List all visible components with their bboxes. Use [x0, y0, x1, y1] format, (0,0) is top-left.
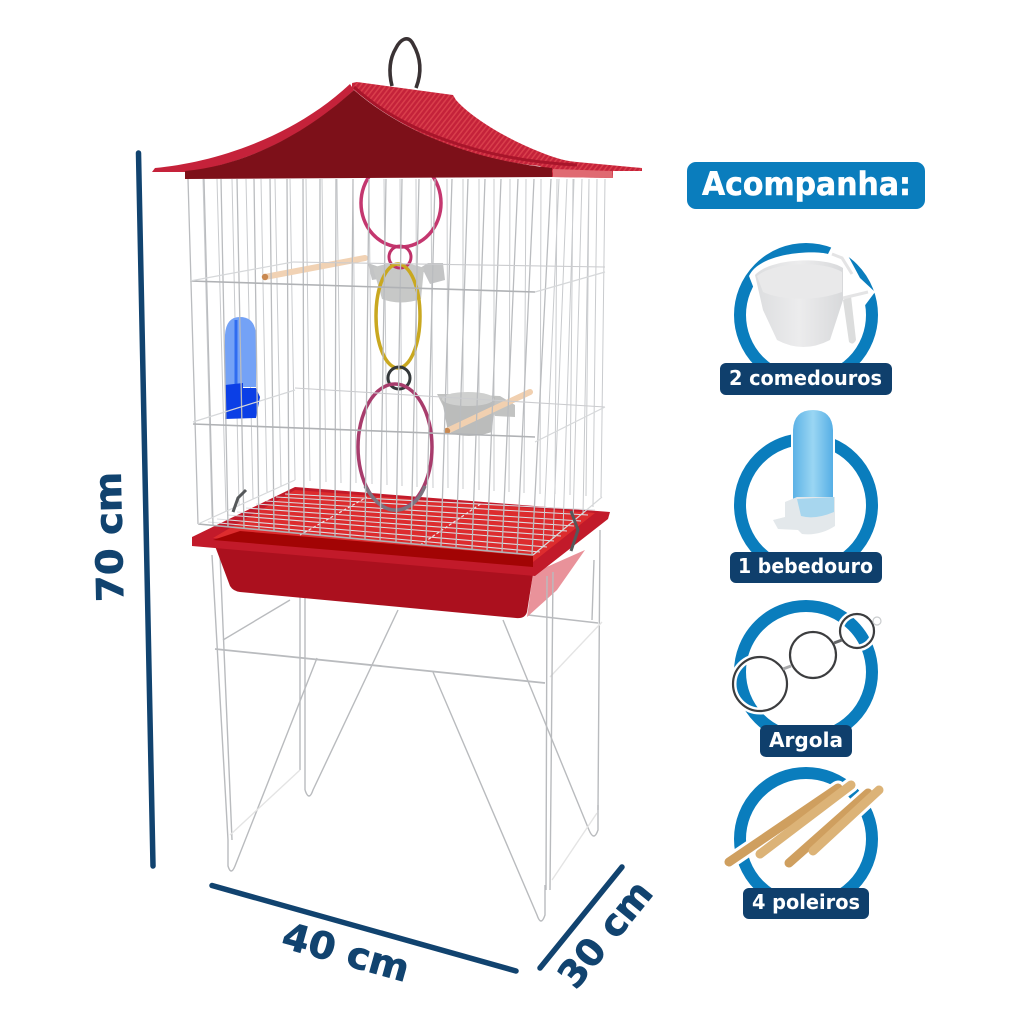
bracket: [843, 296, 856, 344]
tray rim: [192, 487, 610, 576]
item: 2 comedouros: [720, 246, 892, 395]
icon: feeder cup: [749, 246, 875, 350]
item: 1 bebedouro: [730, 408, 882, 583]
cage front wires: [188, 179, 551, 555]
roof ridged side: [352, 82, 642, 178]
feeder lower: [437, 392, 530, 436]
height dimension line: [138, 153, 153, 866]
tray body: [215, 546, 533, 618]
roof left flap: [152, 84, 354, 172]
tray inner wall: [213, 531, 533, 567]
ring: [740, 439, 872, 571]
hanging handle: [390, 39, 420, 88]
floor grid dashed supports: [300, 497, 482, 545]
icon: wooden perches: [729, 785, 879, 863]
hanging rings: [358, 159, 441, 510]
label: [730, 552, 882, 583]
cup body: [755, 260, 843, 347]
item: Argola: Argola: [769, 728, 843, 752]
front right leg wires: [546, 572, 553, 890]
depth label: 30 cm: [549, 872, 661, 996]
roof: [152, 82, 642, 179]
icon: water bottle: [773, 408, 835, 534]
item: 1 bebedouro: 1 bebedouro: [738, 554, 873, 578]
cup interior: [757, 264, 842, 299]
item: 4 poleiros: [729, 773, 879, 919]
cage horizontal bars: [190, 262, 605, 555]
roof underside right: [553, 169, 613, 178]
latches: [233, 490, 578, 551]
depth dimension line: [540, 867, 622, 968]
cage back and side wires: [203, 179, 605, 547]
roof ridge: [354, 87, 577, 165]
roof front panel: [185, 90, 552, 179]
width dimension line: [212, 886, 516, 971]
item: Argola: [733, 606, 881, 757]
cage floor grid: [208, 494, 595, 552]
heading: Acompanha: Acompanha:: [702, 165, 911, 203]
ring: [740, 606, 872, 738]
cage tray: [192, 487, 610, 618]
item: 2 comedouros: 2 comedouros: [729, 366, 882, 390]
perch upper: [262, 258, 365, 280]
tray interior: [213, 490, 595, 562]
feeder upper: [368, 263, 445, 302]
label: [760, 725, 852, 757]
ring: [740, 773, 872, 905]
height label: 70 cm: [87, 472, 132, 602]
item: 4 poleiros: 4 poleiros: [752, 890, 860, 914]
birdcage stand legs: [212, 530, 602, 921]
icon: rings: [733, 614, 881, 711]
water bottle in cage: [225, 317, 260, 419]
width label: 40 cm: [277, 914, 414, 991]
label: [743, 888, 869, 919]
ring: [740, 249, 872, 381]
tray right side: [527, 550, 585, 617]
cup halo: [749, 246, 875, 350]
label: [720, 363, 892, 395]
